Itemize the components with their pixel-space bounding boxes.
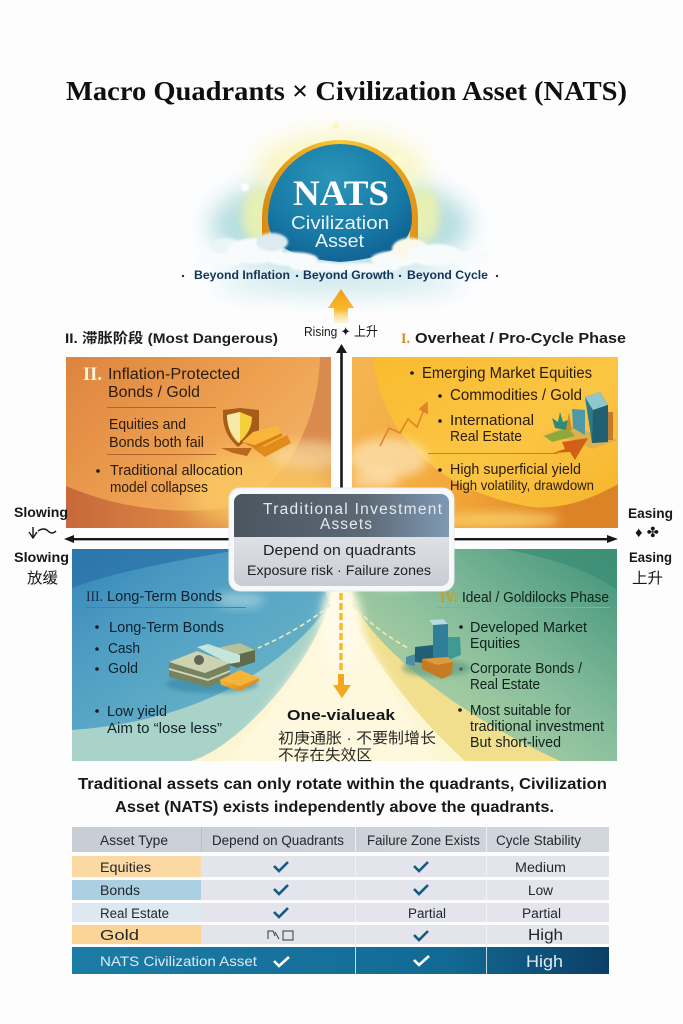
table header row: Failure Zone Exists — [367, 833, 480, 848]
table header row: Asset Type — [100, 833, 168, 848]
card body — [234, 494, 449, 586]
centre note: no failure zone: One-vialueak — [287, 707, 396, 724]
axis labels: easing: Easing — [628, 506, 673, 521]
title: Macro Quadrants × Civilization Asset (NATS) — [66, 76, 627, 106]
row: gold: High — [528, 927, 563, 944]
card text: Depend on quadrants — [263, 542, 416, 559]
panel I bullets: High volatility, drawdown — [450, 477, 594, 493]
summary statement: Asset (NATS) exists independently above the quadrants. — [115, 799, 554, 816]
heading: quadrant I: Overheat / Pro-Cycle Phase — [415, 330, 626, 347]
row: equities — [72, 856, 609, 877]
dashed path from centre to quadrant III — [258, 605, 330, 648]
tagline: beyond inflation, growth, cycle: Beyond Cycle — [407, 270, 488, 282]
orb label: NATS — [293, 173, 389, 213]
panel III bullets: Gold — [108, 661, 138, 677]
panel III bullets: Long-Term Bonds — [109, 620, 224, 636]
row: bonds: Low — [528, 883, 553, 898]
table header row: Cycle Stability — [496, 833, 581, 848]
panel II assets — [108, 366, 240, 401]
panel III bullets: Cash — [108, 641, 140, 657]
axis labels: slowing: 放缓 — [27, 570, 58, 587]
clouds — [196, 233, 490, 273]
tagline: beyond inflation, growth, cycle — [182, 270, 498, 282]
panel II bullet: Traditional allocation — [110, 463, 243, 479]
hero: NATS civilization asset orb: Civilization — [291, 213, 389, 233]
card header: Assets — [320, 516, 372, 533]
axis labels: easing — [628, 506, 673, 587]
panel II bullet — [96, 463, 243, 496]
summary statement — [78, 776, 607, 816]
panel III heading: Long-Term Bonds — [107, 589, 222, 605]
row: gold — [72, 925, 609, 944]
panel II assets: Bonds / Gold — [108, 384, 200, 401]
axis labels: easing: ♦ ✤ — [635, 524, 659, 540]
centre card: traditional investment assets: Exposure risk · Failure zones — [247, 562, 431, 578]
centre note: no failure zone — [278, 707, 436, 764]
panel: quadrant I overheat — [348, 357, 618, 528]
panel III bullets: Aim to “lose less” — [107, 721, 222, 737]
dashed path from centre to quadrant IV — [353, 605, 408, 648]
panel IV bullets: Real Estate — [470, 677, 540, 693]
panel IV bullets: Developed Market — [470, 620, 587, 636]
panel II background — [66, 357, 350, 530]
panel III bullets: Low yield — [107, 704, 167, 720]
panel II assets: Inflation-Protected — [108, 366, 240, 383]
panel III heading — [86, 589, 246, 608]
panel: quadrants III and IV lower field — [72, 549, 617, 761]
panel II failure note — [107, 407, 216, 455]
gold ring and sphere — [262, 140, 418, 262]
row: real estate: Partial — [408, 906, 446, 921]
column dividers — [201, 827, 487, 974]
centre card: traditional investment assets — [229, 488, 454, 591]
centre note: no failure zone: 不存在失效区 — [278, 747, 372, 764]
row: real estate: Real Estate — [100, 906, 169, 921]
central light fan — [232, 616, 433, 760]
row: equities: Medium — [515, 860, 566, 875]
panel I background — [348, 357, 618, 528]
comparison table — [72, 827, 609, 974]
axis: horizontal easing right — [452, 535, 618, 543]
panel III bullets — [95, 620, 224, 737]
axis labels: slowing: Slowing — [14, 505, 68, 520]
icon: shield and gold bars — [221, 408, 291, 457]
row: equities: Equities — [100, 860, 151, 875]
axis: vertical rising — [336, 344, 347, 492]
centre note: no failure zone: 初庚通胀 · 不要制增长 — [278, 730, 436, 747]
quadrant IV background — [348, 592, 560, 761]
panel IV bullets: Most suitable for — [470, 703, 571, 719]
panel I bullets — [410, 365, 594, 493]
row: NATS civilization asset: NATS Civilization Asset — [100, 953, 257, 969]
axis labels: easing: 上升 — [632, 570, 663, 587]
panel I bullets: Emerging Market Equities — [422, 365, 592, 382]
axis labels: slowing: Slowing — [14, 550, 69, 565]
panel IV bullets: Equities — [470, 636, 520, 652]
quadrant III background — [72, 592, 330, 761]
icon: city real estate — [542, 392, 618, 449]
panel II failure note: Equities and — [109, 417, 186, 433]
sky glow behind orb — [210, 123, 470, 296]
table header row — [72, 827, 609, 852]
panel IV bullets: traditional investment — [470, 719, 604, 735]
quadrant III content — [86, 589, 330, 737]
axis: horizontal slowing left — [64, 535, 232, 543]
panel II failure note: Bonds both fail — [109, 435, 204, 451]
row: NATS civilization asset — [72, 947, 609, 974]
panel: quadrant II stagflation — [66, 357, 350, 530]
panel I bullets: Real Estate — [450, 428, 522, 445]
panel IV heading: IV: — [440, 590, 458, 606]
quadrant IV content — [353, 590, 610, 751]
panel IV bullets: But short-lived — [470, 735, 561, 751]
arrow: rising to NATS — [328, 289, 354, 323]
tagline: beyond inflation, growth, cycle: Beyond Growth — [303, 270, 394, 282]
divider arrow — [428, 438, 588, 460]
panel IV bullets — [458, 620, 604, 751]
arrow: orange dashed downward — [333, 593, 351, 698]
panel IV bullets: Corporate Bonds / — [470, 661, 583, 677]
tagline: beyond inflation, growth, cycle: Beyond Inflation — [194, 270, 290, 282]
panel I bullets: Commodities / Gold — [450, 387, 582, 404]
panel III heading: III. — [86, 589, 103, 605]
axis labels: slowing — [14, 505, 69, 587]
icon: office buildings and house — [402, 619, 470, 679]
icon: rising price line — [380, 403, 427, 446]
icon: cash stacks and gold bar — [166, 643, 259, 693]
hero: NATS civilization asset orb — [196, 123, 490, 296]
hero: NATS civilization asset orb: Asset — [315, 231, 364, 251]
row: gold: Gold — [100, 927, 139, 944]
panel II numeral: II. — [83, 364, 102, 385]
row: NATS civilization asset: High — [526, 953, 563, 971]
card frame — [229, 488, 454, 591]
summary statement: Traditional assets can only rotate within the quadrants, Civilization — [78, 776, 607, 793]
table header row: Depend on Quadrants — [212, 833, 344, 848]
heading: quadrant II: II. 滞胀阶段 (Most Dangerous) — [65, 330, 278, 346]
heading: quadrant I: I. — [401, 331, 410, 347]
card header — [234, 494, 449, 537]
row: real estate: Partial — [522, 906, 561, 921]
row: real estate — [72, 903, 609, 922]
panel IV heading: Ideal / Goldilocks Phase — [462, 590, 609, 606]
panel II bullet: model collapses — [110, 480, 208, 496]
axis labels: easing: Easing — [629, 550, 672, 565]
card header: Traditional Investment — [263, 501, 443, 518]
row: bonds: Bonds — [100, 883, 140, 898]
panel I bullets: High superficial yield — [450, 461, 581, 478]
row: bonds — [72, 880, 609, 900]
axis label: rising: Rising ✦ 上升 — [304, 324, 378, 339]
panel I bullets: International — [450, 412, 534, 429]
